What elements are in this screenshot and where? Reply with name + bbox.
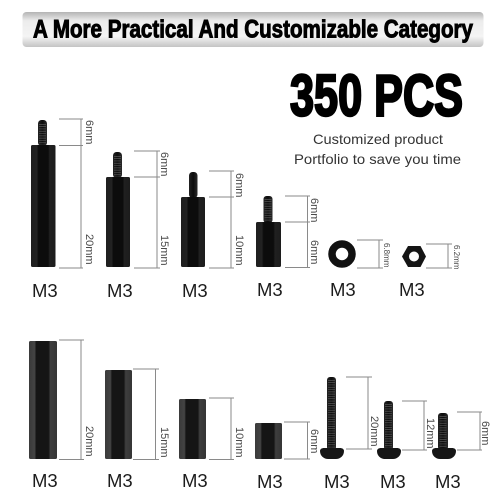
description text: Customized product — [313, 131, 443, 147]
description text: Portfolio to save you time — [294, 151, 461, 167]
washer — [330, 240, 391, 300]
standoff 20mm with thread: M3 — [32, 280, 58, 301]
spacer 10mm: 10mm — [233, 427, 245, 458]
standoff 15mm with thread — [106, 151, 170, 301]
standoff 15mm with thread: 6mm — [158, 152, 170, 176]
standoff 15mm with thread: 15mm — [158, 235, 170, 266]
spacer 6mm: 6mm — [308, 429, 320, 453]
screw 20mm: 20mm — [368, 416, 380, 447]
spacer 6mm: M3 — [257, 471, 283, 492]
spacer 20mm: 20mm — [83, 426, 95, 457]
spacer 20mm: M3 — [32, 470, 58, 491]
standoff 10mm with thread: 10mm — [233, 235, 245, 266]
hex nut: M3 — [399, 279, 425, 300]
spacer 10mm — [179, 398, 245, 491]
screw 6mm: M3 — [435, 471, 461, 492]
standoff 10mm with thread — [181, 171, 245, 301]
screw 20mm — [320, 377, 380, 492]
spacer 10mm: M3 — [182, 470, 208, 491]
washer: M3 — [330, 279, 356, 300]
standoff 20mm with thread: 6mm — [83, 120, 95, 144]
hex nut: 6.2mm — [452, 245, 461, 270]
standoff 6mm with thread: 6mm — [308, 198, 320, 222]
screw 12mm: M3 — [380, 471, 406, 492]
description text — [294, 131, 461, 167]
standoff 6mm with thread: M3 — [257, 279, 283, 300]
standoff 20mm with thread: 20mm — [83, 234, 95, 265]
screw 6mm: 6mm — [479, 421, 491, 445]
spacer 6mm — [255, 422, 320, 492]
standoff 20mm with thread — [31, 119, 95, 301]
standoff 6mm with thread — [256, 196, 320, 300]
screw 12mm: 12mm — [424, 418, 436, 449]
spacer 15mm: 15mm — [158, 427, 170, 458]
screw 6mm — [432, 412, 491, 492]
spacer 15mm: M3 — [107, 470, 133, 491]
hex nut — [399, 244, 461, 300]
spacer 15mm — [105, 369, 170, 491]
screw 20mm: M3 — [324, 471, 350, 492]
standoff 10mm with thread: 6mm — [233, 173, 245, 197]
standoff 10mm with thread: M3 — [182, 280, 208, 301]
washer: 6.8mm — [382, 243, 391, 268]
screw 12mm — [377, 401, 436, 492]
standoff 6mm with thread: 6mm — [308, 240, 320, 264]
standoff 15mm with thread: M3 — [107, 280, 133, 301]
spacer 20mm — [29, 340, 95, 491]
